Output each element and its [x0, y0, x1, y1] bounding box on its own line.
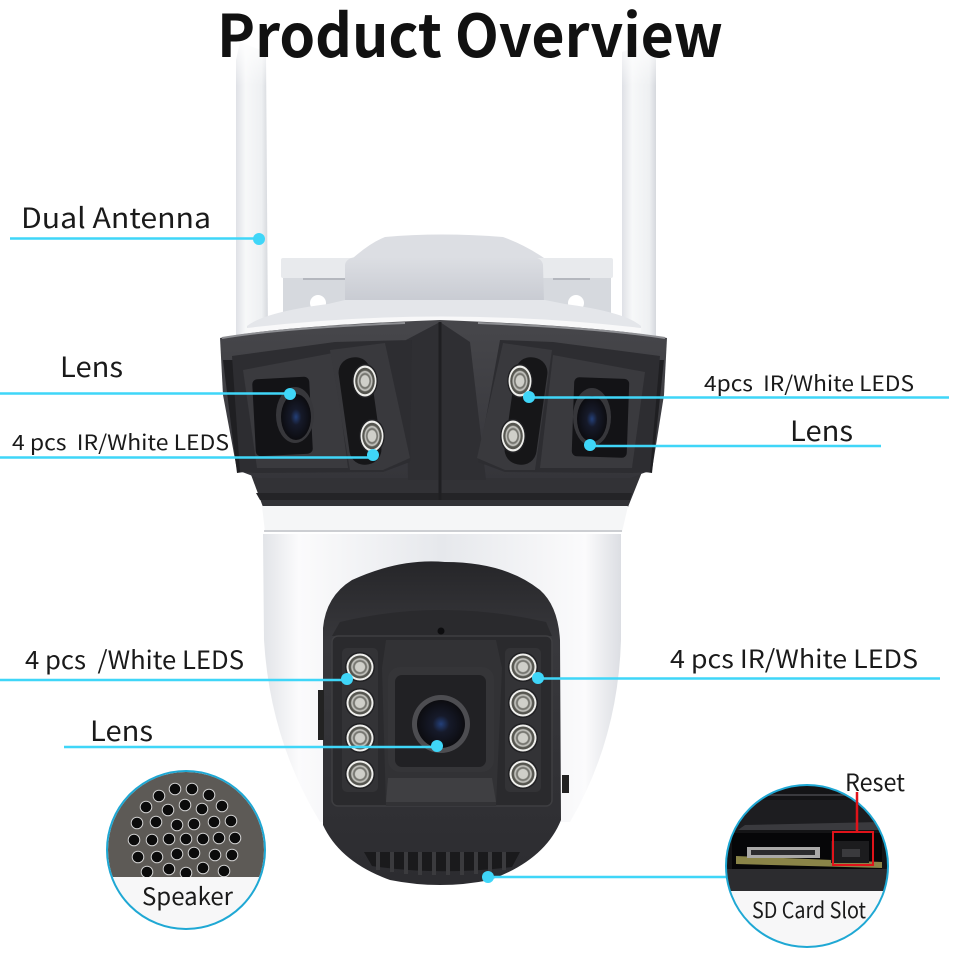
reset marker: [833, 792, 873, 865]
label: reset: Reset: [845, 763, 905, 798]
lens module: [382, 640, 502, 806]
callout lines: [0, 238, 949, 877]
vents: [364, 852, 520, 871]
dark camera ring: [220, 320, 667, 478]
gimbal head: [323, 561, 561, 885]
label: center lens: Lens: [90, 710, 153, 750]
callout dots: [253, 233, 596, 883]
left lens housing: [223, 340, 412, 473]
lens panel: [332, 636, 552, 806]
left antenna: [236, 42, 268, 340]
left LEDs: [342, 648, 378, 792]
label: front right leds: 4 pcs IR/White LEDS: [670, 640, 918, 676]
wall mount plate: [281, 258, 613, 322]
label: left lens: Lens: [60, 346, 123, 386]
camera illustration: [220, 36, 667, 885]
right LEDs: [505, 648, 541, 792]
panel: speaker: [106, 770, 266, 930]
left LED panel: [330, 343, 410, 470]
speaker strip: [386, 778, 496, 802]
collar: [262, 506, 628, 532]
center lens: [412, 695, 470, 753]
label: left leds: 4 pcs IR/White LEDS: [12, 427, 229, 457]
right LED panel: [477, 343, 552, 470]
speaker label: Speaker: [142, 877, 234, 912]
top disk: [247, 300, 641, 336]
label: front left leds: 4 pcs /White LEDS: [25, 641, 244, 677]
right lens: [573, 388, 611, 446]
right lens housing: [477, 340, 664, 473]
label: right lens: Lens: [790, 410, 853, 450]
right antenna: [622, 42, 656, 340]
label: dual antenna: Dual Antenna: [21, 197, 211, 237]
left lens: [276, 387, 314, 443]
label: right leds: 4pcs IR/White LEDS: [704, 368, 914, 398]
sd card label: SD Card Slot: [752, 893, 866, 925]
lower dark band: [250, 472, 642, 507]
speaker holes: [128, 783, 241, 879]
panel: sd card slot: [724, 784, 890, 951]
main white body: [263, 534, 621, 822]
dome: [345, 234, 544, 302]
